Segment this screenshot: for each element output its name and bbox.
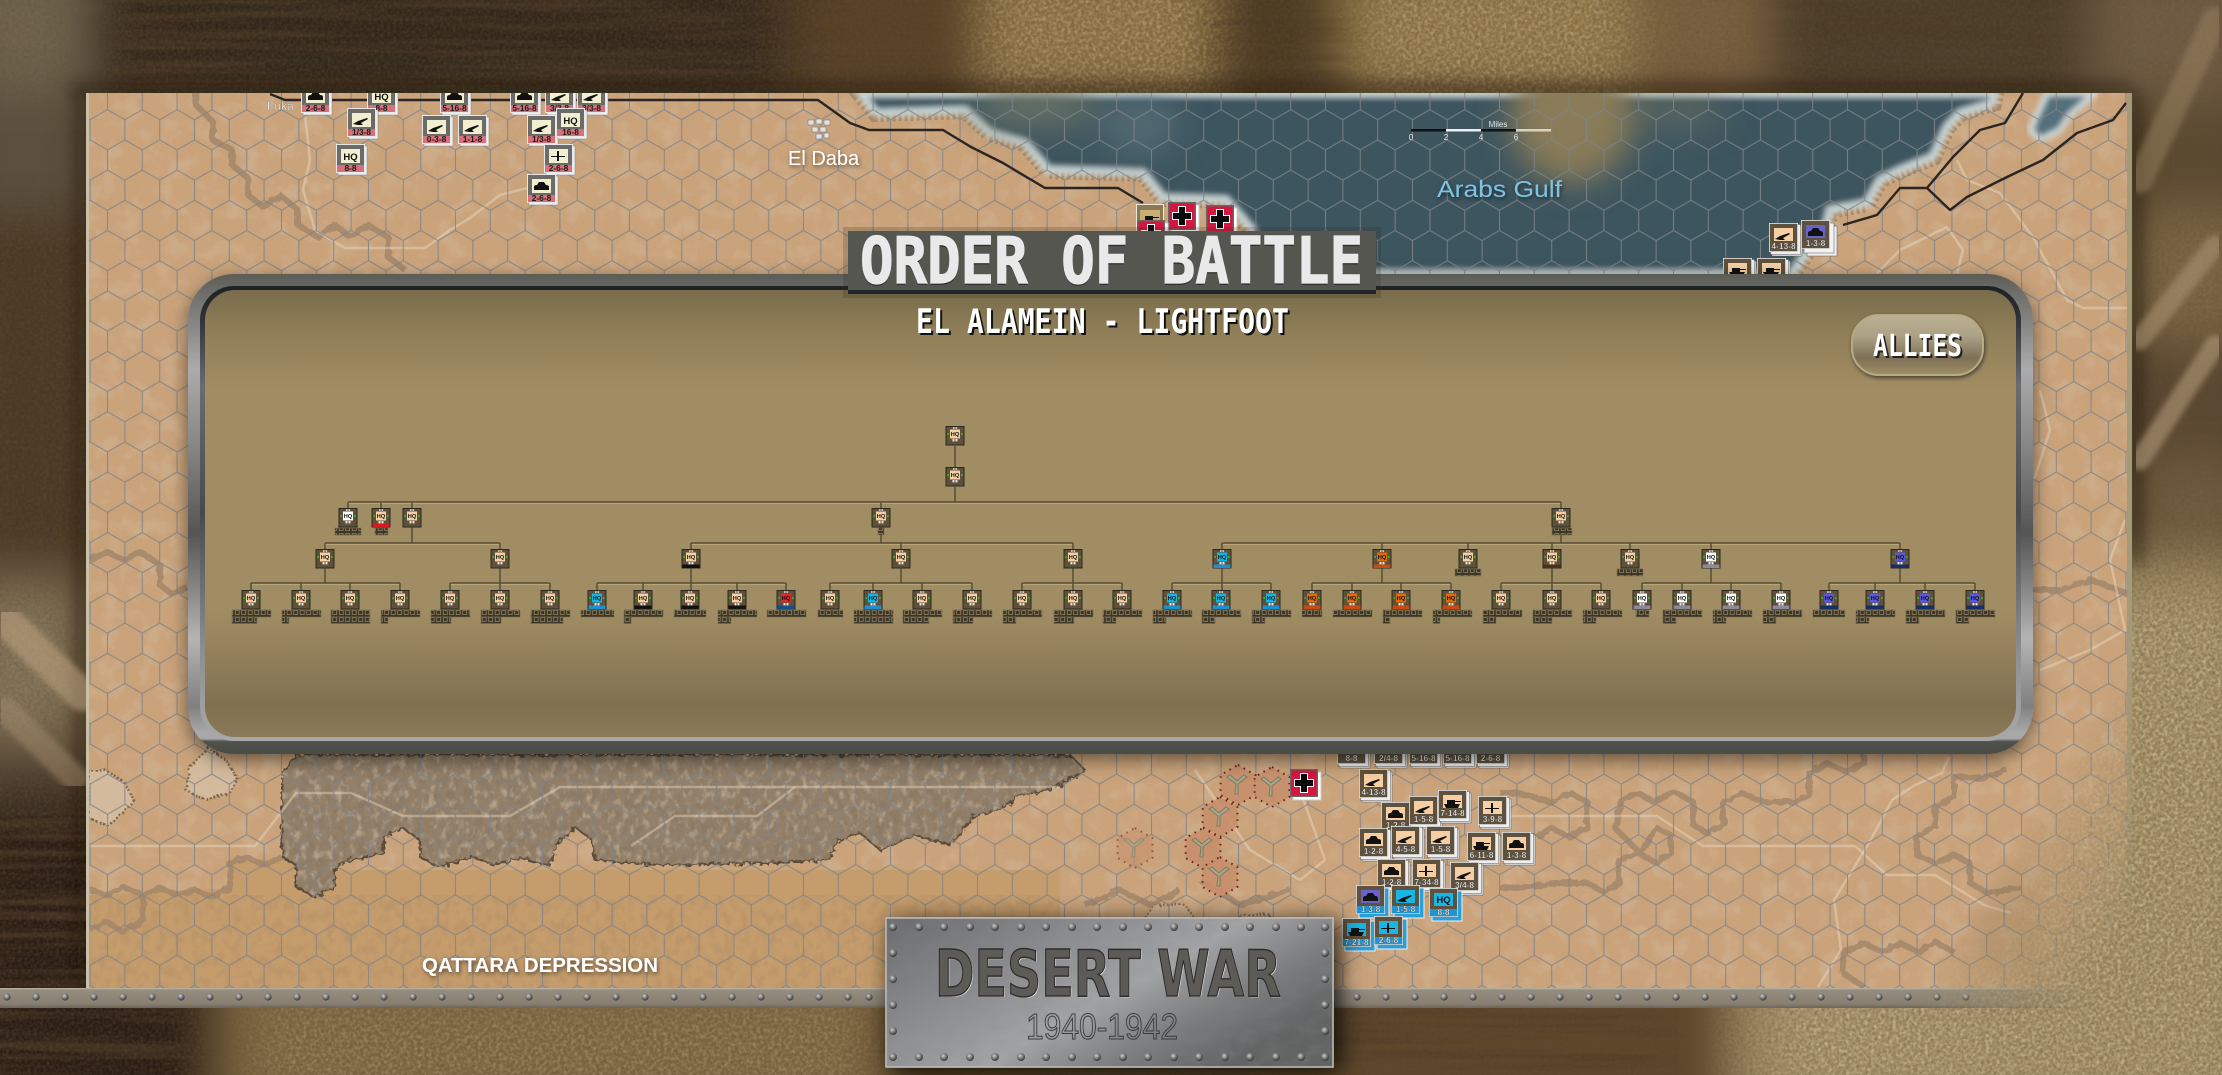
logo plate: Desert War 1940-1942: 1940-1942 (1026, 1006, 1178, 1047)
org chart: corps level: HQ (1069, 555, 1078, 561)
org chart: command level: HQ (951, 473, 960, 479)
scale bar: Miles (1489, 120, 1507, 129)
counters: southern allied group: HQ (1436, 895, 1451, 906)
counters: German north-west group: 8-8 (344, 163, 357, 173)
counters: German north-west group: 0-3-8 (427, 134, 447, 144)
counters: eastern coast stack: 1-3-8 (1806, 238, 1826, 248)
map frame highlight (86, 93, 89, 988)
counters: southern allied group: 4-13-8 (1361, 787, 1386, 797)
org chart: division level with unit composition labels: HQ (496, 596, 505, 602)
counters: southern allied group: 5-16-8 (1411, 753, 1436, 763)
counters: German north-west group: 1-1-8 (463, 134, 483, 144)
counters: southern allied group: 7-34-8 (1414, 877, 1439, 887)
org chart: army level: HQ (377, 514, 386, 520)
counters: southern allied group: 2-6-8 (1379, 935, 1399, 945)
org chart: division level with unit composition labels: HQ (297, 596, 306, 602)
counters: German north-west group: 2-6-8 (306, 103, 326, 113)
heading plate: ORDER OF BATTLE: ORDER OF BATTLE (860, 225, 1363, 299)
button: Allies: ALLIES (1875, 331, 1964, 366)
counters: southern allied group: 8-8 (1345, 753, 1358, 763)
org chart: division level with unit composition labels: HQ (918, 596, 927, 602)
org chart: division level with unit composition labels: HQ (593, 596, 602, 602)
counters: German north-west group: 1/3-8 (532, 134, 551, 144)
minefield hexes (1118, 765, 1289, 897)
counters: southern allied group (1290, 735, 1535, 951)
org chart: division level with unit composition labels: HQ (826, 596, 835, 602)
scale bar: 6 (1514, 133, 1519, 142)
org chart: division level with unit composition labels: HQ (1921, 596, 1930, 602)
org chart: division level with unit composition labels: HQ (1497, 596, 1506, 602)
counters: German north-west group (301, 84, 608, 205)
org chart: division level with unit composition labels: HQ (1548, 596, 1557, 602)
counters: eastern coast stack: 4-13-8 (1771, 241, 1796, 251)
subtitle: El Alamein - Lightfoot: EL ALAMEIN - LIGHTFOOT (916, 302, 1289, 342)
org chart: division level with unit composition labels: HQ (1308, 596, 1317, 602)
logo plate: Desert War 1940-1942: DESERT WAR (936, 939, 1282, 1013)
org chart: division level with unit composition labels: HQ (247, 596, 256, 602)
org chart: corps level: HQ (897, 555, 906, 561)
org chart: army level: HQ (877, 514, 886, 520)
counters: southern allied group: 2-6-8 (1481, 753, 1501, 763)
counters: German north-west group: HQ (343, 152, 358, 163)
counters: German north-west group: 2-6-8 (532, 193, 552, 203)
org chart: division level with unit composition labels: HQ (1069, 596, 1078, 602)
counters: coast group near title (1136, 202, 1237, 251)
org chart: division level with unit composition labels: HQ (1678, 596, 1687, 602)
pale rough hexes (89, 746, 1274, 918)
counters: German north-west group: 5-16-8 (442, 103, 467, 113)
org chart: division level with unit composition labels: HQ (1825, 596, 1834, 602)
counters: southern allied group: 5-16-8 (1445, 753, 1470, 763)
rope at right edge (2140, 20, 2215, 460)
counters: southern allied group: 6-11-8 (1470, 850, 1494, 860)
escarpment lines (90, 93, 2132, 987)
org chart: division level with unit composition labels: HQ (1018, 596, 1027, 602)
rope at left edge (5, 620, 82, 778)
place label: El Daba: El Daba (788, 148, 860, 170)
org chart: corps level (316, 550, 1909, 576)
org chart: corps level: HQ (1548, 555, 1557, 561)
counters: German north-west group: 16-8 (562, 127, 579, 137)
org chart: command level (946, 426, 964, 486)
steel strip (0, 988, 2130, 1008)
Qattara depression terrain (86, 857, 1060, 988)
counters: German north-west group: 8-8 (375, 103, 388, 113)
scale bar (1409, 120, 1551, 142)
org chart: corps level: HQ (1218, 555, 1227, 561)
org chart: division level with unit composition labels: HQ (1217, 596, 1226, 602)
org chart: division level with unit composition labels: HQ (639, 596, 648, 602)
rivets (889, 923, 1329, 1061)
org chart: corps level: HQ (321, 555, 330, 561)
org chart: corps level: HQ (1464, 555, 1473, 561)
logo plate: Desert War 1940-1942: DESERT WAR (935, 938, 1281, 1012)
roads (88, 115, 2127, 987)
org chart: division level with unit composition labels: HQ (686, 596, 695, 602)
counters: southern allied group: 7-21-8 (1344, 937, 1369, 947)
org chart: army level: HQ (344, 514, 353, 520)
counters: southern allied group: 1-3-8 (1361, 904, 1381, 914)
counters: southern allied group: 7-14-8 (1440, 808, 1465, 818)
railway lines (270, 93, 2126, 225)
org chart: division level with unit composition labels: HQ (396, 596, 405, 602)
logo plate: Desert War 1940-1942 (886, 918, 1333, 1067)
counters: southern allied group: 1-3-8 (1507, 850, 1527, 860)
sea (860, 93, 2095, 274)
counters: German north-west group: 3/3-8 (582, 103, 601, 113)
org chart: division level with unit composition labels: HQ (869, 596, 878, 602)
counters: southern allied group: 1-5-8 (1396, 904, 1416, 914)
org chart: corps level: HQ (1707, 555, 1716, 561)
counters: southern allied group: 3-9-8 (1483, 814, 1503, 824)
counters: German north-west group: 3/3-8 (550, 103, 569, 113)
org chart: division level with unit composition labels: HQ (1447, 596, 1456, 602)
org chart: corps level: HQ (1378, 555, 1387, 561)
org chart: division level with unit composition labels: HQ (1348, 596, 1357, 602)
org chart: division level with unit composition labels: HQ (546, 596, 555, 602)
counters: German north-west group: 5-16-8 (512, 103, 537, 113)
org chart: division level with unit composition labels: HQ (1397, 596, 1406, 602)
counters: German north-west group: 2-6-8 (549, 163, 569, 173)
org chart: division level with unit composition labels: HQ (1871, 596, 1880, 602)
scale bar: 4 (1479, 133, 1484, 142)
button: Allies (1852, 315, 1983, 375)
org chart: division level with unit composition labels: HQ (1727, 596, 1736, 602)
subtitle: El Alamein - Lightfoot: EL ALAMEIN - LIGHTFOOT (918, 304, 1291, 344)
org chart: army level: HQ (1557, 514, 1566, 520)
counters: southern allied group: 1-2-8 (1382, 877, 1402, 887)
counters: southern allied group: 1-2-8 (1386, 820, 1406, 830)
scale bar: 2 (1444, 133, 1449, 142)
rough escarpment terrain (282, 755, 1085, 897)
counters: German north-west group: 1/3-8 (352, 127, 371, 137)
org chart: corps level: HQ (687, 555, 696, 561)
counters: southern allied group: 3/4-8 (1455, 880, 1474, 890)
org chart: division level with unit composition labels: HQ (1118, 596, 1127, 602)
org chart: division level with unit composition labels: HQ (968, 596, 977, 602)
counters: southern allied group: 1-2-8 (1364, 846, 1384, 856)
org chart: army level: HQ (408, 514, 417, 520)
org chart: division level with unit composition labels: HQ (1168, 596, 1177, 602)
place label: Arabs Gulf: Arabs Gulf (1437, 176, 1563, 202)
org chart connectors (251, 446, 1975, 590)
town icon: El Daba (808, 119, 830, 139)
org chart: division level with unit composition labels: HQ (782, 596, 791, 602)
org chart: corps level: HQ (1626, 555, 1635, 561)
button: Allies: ALLIES (1873, 329, 1962, 364)
counters: southern allied group: 8-8 (1437, 907, 1450, 917)
counters: German north-west group: HQ (374, 92, 389, 103)
counters: German north-west group: HQ (563, 116, 578, 127)
panel: order of battle (188, 274, 2033, 754)
counters: southern allied group: 1-5-8 (1414, 814, 1434, 824)
sea fog (961, 93, 1726, 200)
counters: southern allied group: 1-5-8 (1431, 844, 1451, 854)
place label: Qattara Depression: QATTARA DEPRESSION (422, 955, 658, 977)
org chart: division level with unit composition labels: HQ (733, 596, 742, 602)
org chart: division level with unit composition labels: HQ (1971, 596, 1980, 602)
org chart: division level with unit composition labels: HQ (1777, 596, 1786, 602)
heading plate: ORDER OF BATTLE: ORDER OF BATTLE (860, 227, 1363, 301)
org chart: army level (335, 508, 1572, 535)
counters: eastern coast stack (1723, 220, 1837, 291)
org chart: corps level: HQ (1896, 555, 1905, 561)
org chart: division level with unit composition labels: HQ (1597, 596, 1606, 602)
map shadow on background (70, 84, 2142, 988)
org chart: division level with unit composition labels: HQ (1267, 596, 1276, 602)
org chart: corps level: HQ (496, 555, 505, 561)
org chart: division level with unit composition labels: HQ (1638, 596, 1647, 602)
org chart: division level with unit composition labels (232, 590, 1995, 624)
scale bar: 0 (1409, 133, 1414, 142)
right map frame (2127, 93, 2132, 988)
org chart: command level: HQ (951, 432, 960, 438)
org chart: division level with unit composition labels: HQ (346, 596, 355, 602)
place label: Fuka: Fuka (267, 99, 294, 113)
counters: southern allied group: 4-5-8 (1396, 844, 1416, 854)
hex grid (86, 93, 2132, 988)
org chart: division level with unit composition labels: HQ (446, 596, 455, 602)
counters: southern allied group: 2/4-8 (1379, 753, 1398, 763)
